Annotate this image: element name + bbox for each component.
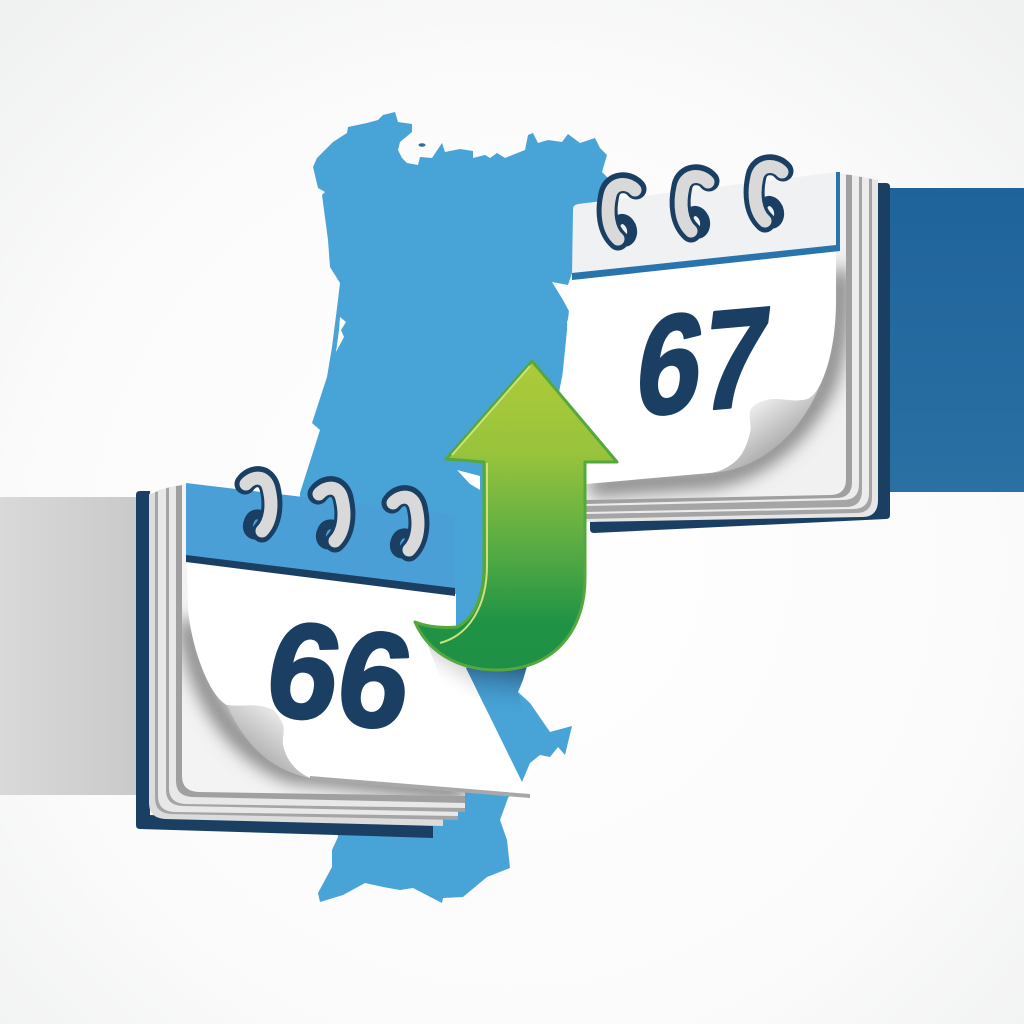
page bottom edge <box>310 776 530 798</box>
rings <box>607 165 783 242</box>
backing board <box>136 491 433 838</box>
ring 2 <box>318 487 345 544</box>
arrow shadow on map <box>466 665 527 718</box>
ring 1 <box>607 183 636 242</box>
ring 2 <box>680 175 709 234</box>
ring 1 <box>245 477 272 534</box>
page curl flap <box>710 385 820 473</box>
map inlets <box>336 317 346 352</box>
page stack <box>585 174 878 522</box>
header <box>186 483 455 592</box>
arrow shadow on page <box>422 630 480 700</box>
calendar 67 <box>560 165 890 533</box>
number 67: 67 <box>628 276 778 446</box>
header rule <box>572 172 840 280</box>
page stack <box>149 484 465 826</box>
grey band <box>0 497 150 795</box>
header rule <box>186 555 455 596</box>
map island <box>418 143 426 147</box>
page shadow <box>590 270 840 486</box>
blue band <box>880 188 1024 492</box>
header <box>572 172 838 275</box>
arrow highlight <box>440 366 530 643</box>
ring 3 <box>754 165 783 224</box>
page <box>187 562 530 798</box>
page shadow <box>188 620 465 792</box>
green arrow <box>415 361 617 718</box>
rings <box>245 477 419 554</box>
ring 3 <box>392 496 419 554</box>
calendar 66 <box>136 477 530 838</box>
page curl flap <box>227 705 310 778</box>
number 66: 66 <box>256 591 424 759</box>
arrow body <box>415 361 617 670</box>
page <box>560 250 836 484</box>
map of Portugal <box>300 112 610 903</box>
backing board <box>590 183 890 533</box>
